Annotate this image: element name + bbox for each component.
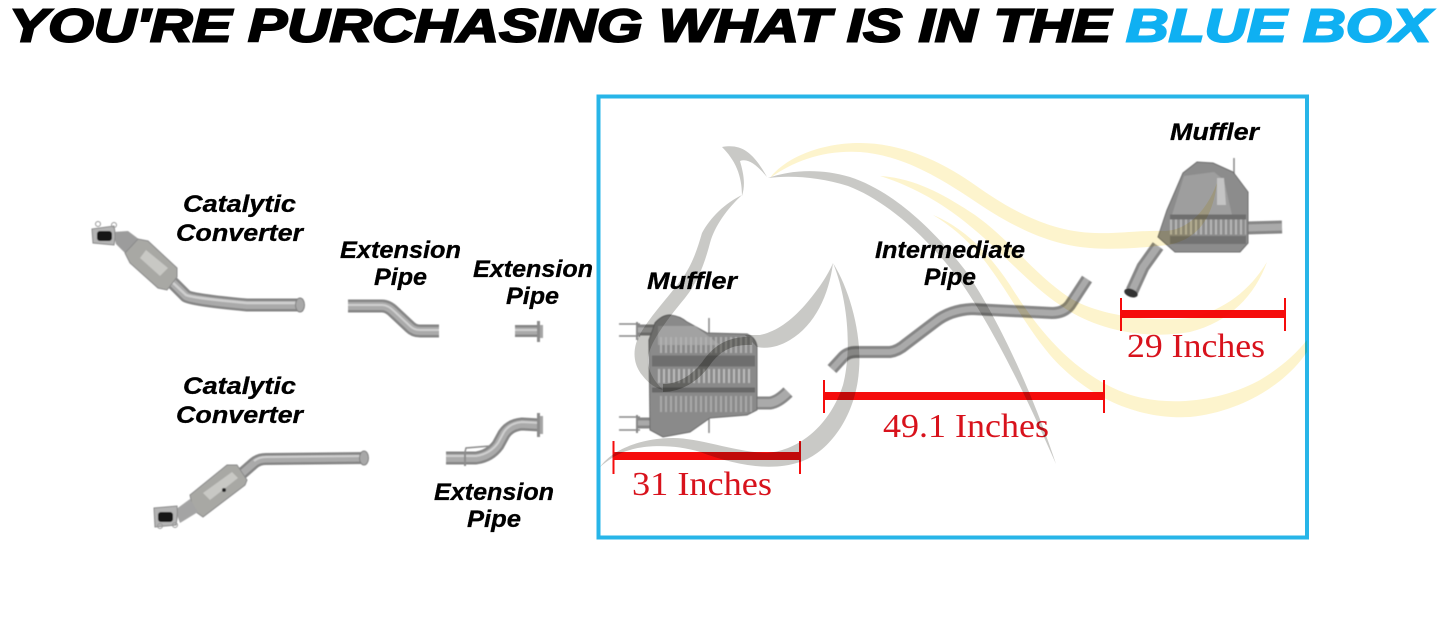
label: extension pipe 2: Pipe — [506, 283, 559, 310]
label: catalytic converter top: Converter — [176, 220, 305, 247]
label: extension pipe 3: Extension — [434, 479, 554, 506]
muffler left — [619, 315, 788, 437]
label: catalytic converter bottom: Catalytic — [183, 373, 296, 400]
intermediate pipe — [832, 279, 1087, 369]
dimension: 49.1 inches: 49.1 Inches — [883, 408, 1049, 445]
label: catalytic converter bottom — [176, 373, 305, 429]
extension pipe 1 — [348, 305, 439, 331]
label: extension pipe 3 — [434, 479, 554, 533]
dimension: 31 inches — [612, 441, 801, 503]
dimension: 31 inches: 31 Inches — [632, 466, 772, 503]
label: extension pipe 2 — [473, 256, 593, 310]
muffler right — [1123, 158, 1282, 299]
catalytic converter top — [92, 222, 304, 312]
dimension: 29 inches — [1120, 298, 1286, 365]
label: extension pipe 3: Pipe — [467, 506, 521, 533]
label: extension pipe 1 — [340, 237, 461, 291]
catalytic converter bottom — [154, 451, 368, 528]
label: extension pipe 1: Extension — [340, 237, 461, 264]
title: YOU'RE PURCHASING WHAT IS IN THE — [9, 0, 1113, 52]
label: catalytic converter top: Catalytic — [183, 191, 296, 218]
panel: blue box — [598, 96, 1307, 538]
label: extension pipe 1: Pipe — [374, 264, 427, 291]
label: muffler right: Muffler — [1170, 119, 1261, 146]
label: intermediate pipe: Intermediate — [875, 237, 1025, 264]
extension pipe 3 — [446, 413, 543, 466]
label: muffler left: Muffler — [647, 268, 739, 295]
label: catalytic converter top — [176, 191, 305, 247]
label: intermediate pipe — [875, 237, 1025, 291]
dimension: 49.1 inches — [823, 380, 1105, 445]
title: BLUE BOX — [1126, 0, 1434, 52]
title — [9, 0, 1434, 52]
label: catalytic converter bottom: Converter — [176, 402, 305, 429]
watermark: horse logo — [600, 143, 1307, 467]
label: intermediate pipe: Pipe — [924, 264, 976, 291]
extension pipe 2 — [515, 321, 543, 342]
label: extension pipe 2: Extension — [473, 256, 593, 283]
dimension: 29 inches: 29 Inches — [1127, 328, 1265, 365]
